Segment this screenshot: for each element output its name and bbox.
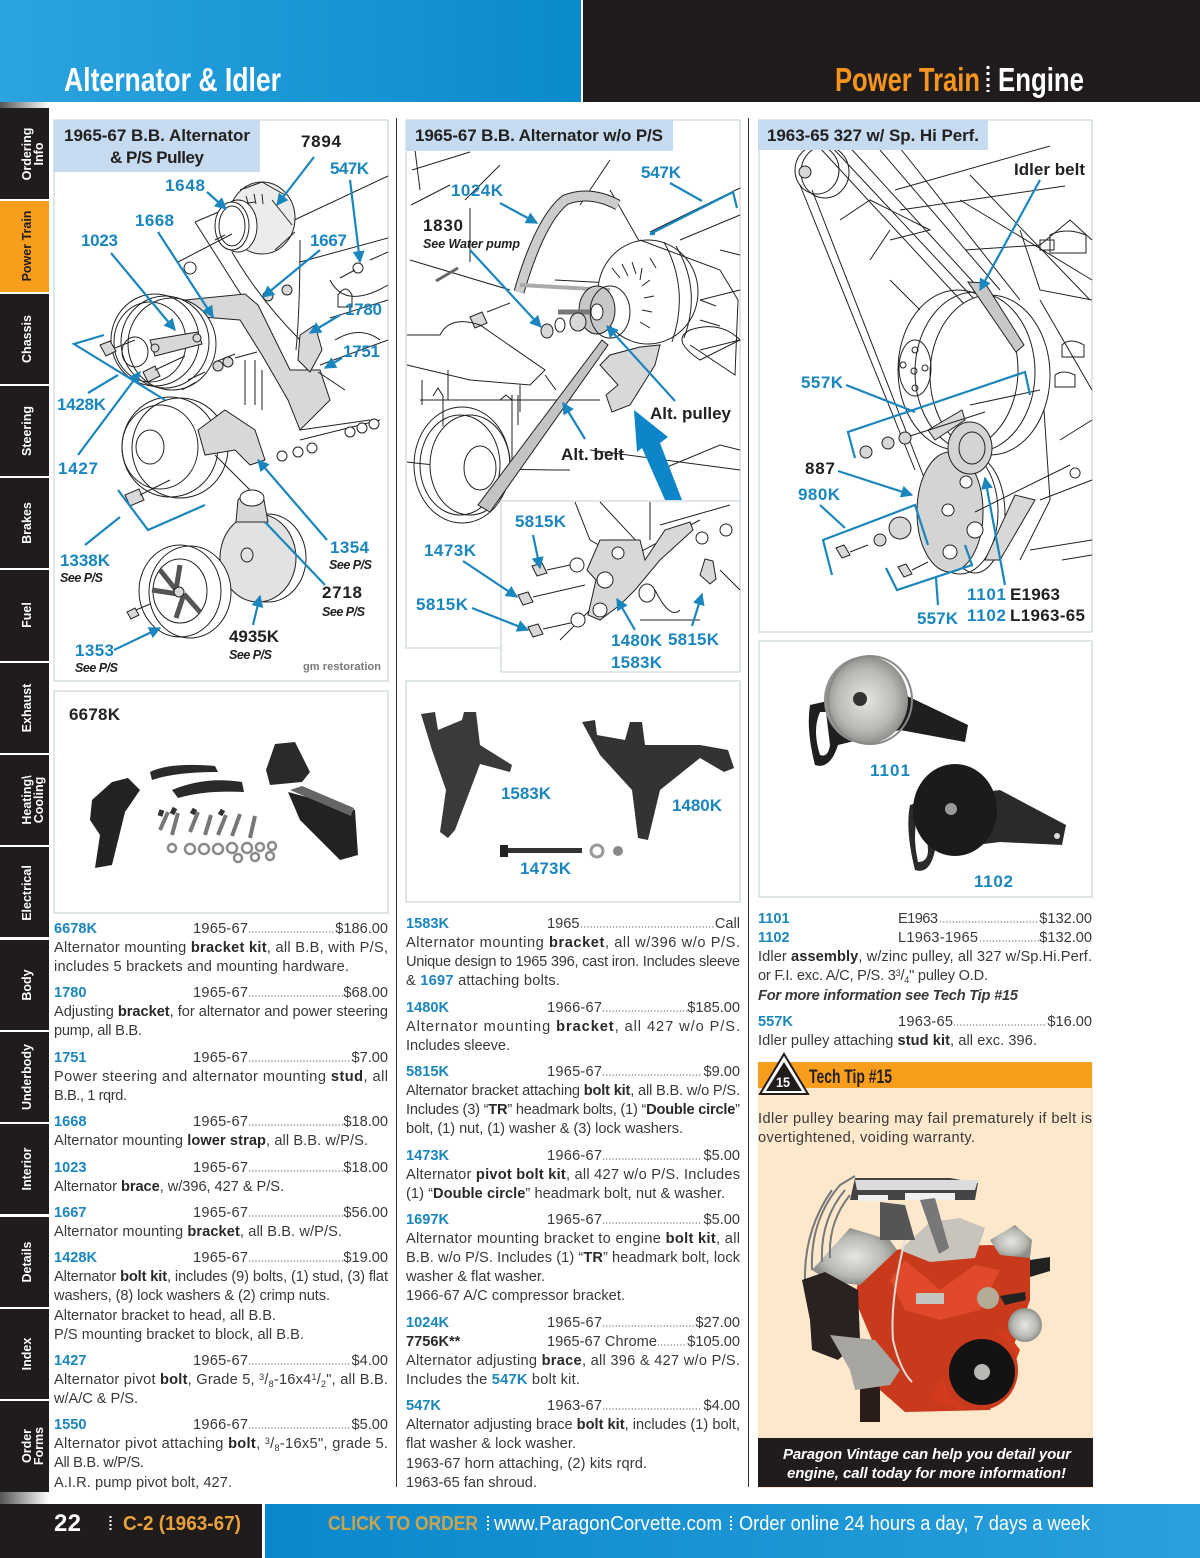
listing: 1480K: Includes sleeve. xyxy=(406,1038,510,1054)
tech tip heading bar xyxy=(758,1062,1092,1088)
part labels: 887 xyxy=(805,459,835,478)
part labels: See P/S xyxy=(329,558,373,572)
tab: exhaust: Exhaust xyxy=(20,683,34,732)
listing: 1751: B.B., 1 rqrd. xyxy=(54,1088,127,1104)
tech tip text: overtightened, voiding warranty. xyxy=(758,1130,975,1146)
panel: 1963-65 327 w/ Sp. Hi Perf. diagram xyxy=(758,120,1092,632)
listing: 1550: / xyxy=(270,1436,275,1452)
listing: 1101 and 1102: 1101 xyxy=(758,911,790,927)
part labels: 1667 xyxy=(310,231,347,250)
listing: 1428K: washers, (8) lock washers & (2) crimp nuts. xyxy=(53,1288,330,1304)
tab: index: Index xyxy=(20,1338,34,1370)
part labels: 5815K xyxy=(668,630,720,649)
part labels: See P/S xyxy=(60,571,104,585)
listing: 5815K: Alternator bracket attaching bolt kit, all B.B. w/o P/S. xyxy=(406,1083,740,1099)
panel title xyxy=(758,120,988,150)
listing: 1427: / xyxy=(264,1372,269,1388)
part labels: 7894 xyxy=(301,132,342,151)
photo labels: 1583K xyxy=(501,784,552,803)
tab: chassis xyxy=(0,294,49,384)
listing: 1101 and 1102: 1102 xyxy=(758,930,790,946)
tab: power train: Power Train xyxy=(20,211,34,281)
listing: 1751: 1751 xyxy=(54,1050,86,1066)
panel: 1101 and 1102 idler pulley photo xyxy=(759,641,1092,897)
tab: body: Body xyxy=(20,969,34,1001)
part labels xyxy=(416,163,732,672)
listing: 1024K and 7756K: Alternator adjusting brace, all 396 & 427 w/o P/S. xyxy=(406,1353,740,1369)
footer: order bar: Order online 24 hours a day, 7 days a week xyxy=(739,1513,1091,1535)
tab: electrical: Electrical xyxy=(20,865,34,921)
photo: right bracket xyxy=(582,720,734,840)
listing: 1428K: $19.00 xyxy=(343,1250,388,1266)
listing: 1101 and 1102: $132.00 xyxy=(1039,930,1092,946)
listing: 6678K: 6678K xyxy=(54,921,97,937)
listing: 1550: Alternator pivot attaching bolt, xyxy=(54,1436,260,1452)
tab: interior: Interior xyxy=(20,1147,34,1191)
part labels: 557K xyxy=(801,373,844,392)
part labels: See P/S xyxy=(229,648,273,662)
listing: 1780: pump, all B.B. xyxy=(54,1023,142,1039)
page title: Alternator & Idler xyxy=(64,61,281,98)
listing: 1101 and 1102: Idler assembly, w/zinc pulley, all 327 w/Sp.Hi.Perf. xyxy=(758,949,1092,965)
listing: 5815K: 5815K xyxy=(406,1064,449,1080)
panel title: 1963-65 327 w/ Sp. Hi Perf. xyxy=(767,126,979,145)
listing: 1101 and 1102 xyxy=(758,911,1092,1004)
photo labels: 1473K xyxy=(520,859,572,878)
listing: 1751: $7.00 xyxy=(351,1050,388,1066)
listing: 1667: Alternator mounting bracket, all B.B. w/P/S. xyxy=(54,1224,342,1240)
listing: 1428K: P/S mounting bracket to block, all B.B. xyxy=(54,1327,304,1343)
part labels: 1102 xyxy=(967,606,1006,625)
panel title: 1965-67 B.B. Alternator & P/S Pulley: 1965-67 B.B. Alternator xyxy=(64,126,250,145)
part labels: See Water pump xyxy=(423,237,520,251)
header: black section band: Engine xyxy=(998,61,1084,98)
panel: 1965-67 B.B. alternator w/o P/S diagram xyxy=(406,120,740,672)
part labels: 1780 xyxy=(345,300,382,319)
line art: alternator without power steering xyxy=(407,150,740,523)
listing: 1101 and 1102: " pulley O.D. xyxy=(909,968,988,984)
listing: 1780: 1965-67 xyxy=(193,985,248,1001)
listing: 1428K: Alternator bracket to head, all B.B. xyxy=(54,1308,276,1324)
panel title xyxy=(406,120,673,151)
tab: ordering info xyxy=(0,108,49,199)
listing: 5815K xyxy=(406,1064,740,1137)
footer: order bar: CLICK TO ORDER xyxy=(328,1513,478,1535)
part labels: 1648 xyxy=(165,176,205,195)
panel: 6678K bracket kit photo xyxy=(54,691,388,913)
listing: 1550 xyxy=(54,1417,388,1491)
tab: steering: Steering xyxy=(20,406,34,456)
tech tip heading bar: Tech Tip #15 xyxy=(809,1067,892,1088)
photo: 1101 zinc pulley xyxy=(809,656,968,766)
part labels: L1963-65 xyxy=(1010,606,1085,625)
listing: 1473K: (1) “Double circle” headmark bolt, nut & washer. xyxy=(406,1186,725,1202)
photo: left bracket xyxy=(421,712,512,838)
listing: 1427: / xyxy=(317,1372,322,1388)
listing: 1480K: Alternator mounting bracket, all 427 w/o P/S. xyxy=(406,1019,740,1035)
listing: 1024K and 7756K: 7756K** xyxy=(406,1334,461,1350)
tab: heating cooling: Cooling xyxy=(32,777,46,823)
listing: 1024K and 7756K: 1965-67 Chrome xyxy=(547,1334,657,1350)
listing: 1101 and 1102: 4 xyxy=(904,975,909,985)
panel: tech tip #15 xyxy=(758,1054,1093,1488)
listing: 1550: -16x5", grade 5. xyxy=(280,1436,388,1452)
part labels: 4935K xyxy=(229,627,280,646)
tab: interior xyxy=(0,1124,49,1214)
big arrow: bracket detail xyxy=(634,410,682,500)
listing: 547K xyxy=(406,1398,740,1491)
listing: 1550: A.I.R. pump pivot bolt, 427. xyxy=(54,1475,232,1491)
part labels: 557K xyxy=(917,609,959,628)
listing: 1473K xyxy=(406,1148,740,1202)
tab: chassis: Chassis xyxy=(20,315,34,363)
part labels: 980K xyxy=(798,485,841,504)
listing: 547K: 1963-65 fan shroud. xyxy=(406,1475,537,1491)
tab: order forms xyxy=(0,1401,49,1492)
tab: power train xyxy=(0,201,49,292)
listing: 6678K: includes 5 brackets and mounting hardware. xyxy=(54,959,349,975)
panel title: 1965-67 B.B. Alternator & P/S Pulley xyxy=(54,120,260,172)
listing: 1668: 1668 xyxy=(54,1114,86,1130)
tab: underbody: Underbody xyxy=(20,1044,34,1110)
text column 3: part listings xyxy=(758,911,1092,1049)
footer: order bar: www.ParagonCorvette.com xyxy=(493,1513,722,1535)
part labels: 1023 xyxy=(81,231,118,250)
listing: 1473K: 1966-67 xyxy=(547,1148,602,1164)
listing: 1583K: & 1697 attaching bolts. xyxy=(406,973,560,989)
call-to-action bar: Paragon Vintage can help you detail your xyxy=(783,1446,1072,1463)
listing: 1583K: 1965 xyxy=(547,916,579,932)
photo label: 6678K xyxy=(69,705,121,724)
tab: details xyxy=(0,1217,49,1307)
listing: 1667: $56.00 xyxy=(343,1205,388,1221)
listing: 1101 and 1102: L1963-1965 xyxy=(898,930,978,946)
part labels: 5815K xyxy=(416,595,469,614)
listing: 1697K: 1697K xyxy=(406,1212,449,1228)
listing: 1101 and 1102: / xyxy=(900,968,905,984)
part labels: 1830 xyxy=(423,216,463,235)
tab: exhaust xyxy=(0,663,49,753)
listing: 5815K: $9.00 xyxy=(703,1064,740,1080)
listing: 557K: 557K xyxy=(758,1014,793,1030)
listing: 1697K: B.B. w/o P/S. Includes (1) “TR” headmark bolt, lock xyxy=(406,1250,741,1266)
tab: body xyxy=(0,940,49,1030)
tab: order forms: Order xyxy=(20,1429,34,1463)
listing: 1780: 1780 xyxy=(54,985,86,1001)
listing: 1550: All B.B. w/P/S. xyxy=(54,1455,144,1471)
call-to-action bar xyxy=(758,1438,1093,1487)
listing: 1101 and 1102: or F.I. exc. A/C, P/S. 3 xyxy=(758,968,896,984)
listing: 1667: 1667 xyxy=(54,1205,86,1221)
listing: 1667: 1965-67 xyxy=(193,1205,248,1221)
photo: bolt and washers xyxy=(500,845,623,857)
listing: 1428K: 1428K xyxy=(54,1250,97,1266)
part labels: 1473K xyxy=(424,541,477,560)
listing: 1550: 3 xyxy=(265,1436,270,1446)
listing: 1780 xyxy=(54,985,388,1039)
part labels: 5815K xyxy=(515,512,567,531)
listing: 1751 xyxy=(54,1050,388,1104)
icon: warning triangle: 15 xyxy=(776,1074,790,1090)
listing: 547K: flat washer & lock washer. xyxy=(406,1436,576,1452)
listing: 1550: 1966-67 xyxy=(193,1417,248,1433)
listing: 1668 xyxy=(54,1114,388,1149)
part labels: Alt. belt xyxy=(561,445,624,464)
arrows: part callouts xyxy=(820,180,1040,605)
listing: 1473K: Alternator pivot bolt kit, all 427 w/o P/S. Includes xyxy=(406,1167,740,1183)
listing: 1024K and 7756K xyxy=(406,1315,740,1388)
footer: page number and model bar xyxy=(0,1504,262,1558)
listing: 1023: 1023 xyxy=(54,1160,86,1176)
listing: 1101 and 1102: E1963 xyxy=(898,911,938,927)
part labels: gm restoration xyxy=(303,661,381,673)
listing: 6678K: 1965-67 xyxy=(193,921,248,937)
tab: heating cooling: Heating\ xyxy=(20,775,34,825)
part labels: 2718 xyxy=(322,583,362,602)
photo labels: 1102 xyxy=(974,872,1013,891)
call-to-action bar: engine, call today for more information! xyxy=(787,1465,1066,1482)
listing: 547K: $4.00 xyxy=(703,1398,740,1414)
listing: 557K: 1963-65 xyxy=(898,1014,953,1030)
line art: P/S pulley and pump xyxy=(122,360,380,638)
listing: 1024K and 7756K: $105.00 xyxy=(687,1334,740,1350)
tab: ordering info: Info xyxy=(32,142,46,165)
text column 2: part listings xyxy=(405,916,741,1491)
listing: 1480K: $185.00 xyxy=(687,1000,740,1016)
listing: 1427: 1965-67 xyxy=(193,1353,248,1369)
listing: 547K: 1963-67 horn attaching, (2) kits rqrd. xyxy=(406,1456,647,1472)
part labels: 1583K xyxy=(611,653,663,672)
tab: brakes xyxy=(0,478,49,568)
listing: 1427 xyxy=(53,1353,388,1407)
tab: brakes: Brakes xyxy=(20,502,34,544)
photo labels: 1101 xyxy=(870,761,910,780)
tab: order forms: Forms xyxy=(32,1427,46,1465)
part labels xyxy=(798,160,1085,628)
listing: 1427: ", all B.B. xyxy=(326,1372,388,1388)
listing: 1550: 1550 xyxy=(54,1417,86,1433)
listing: 1427: 8 xyxy=(269,1379,274,1389)
inset: bracket exploded view xyxy=(501,501,740,672)
tab: underbody xyxy=(0,1032,49,1122)
listing: 1024K and 7756K: $27.00 xyxy=(695,1315,740,1331)
listing: 5815K: 1965-67 xyxy=(547,1064,602,1080)
part labels: E1963 xyxy=(1010,585,1060,604)
listing: 1427: 2 xyxy=(321,1379,326,1389)
listing: 1697K: Alternator mounting bracket to engine bolt kit, all xyxy=(406,1231,740,1247)
listing: 547K: Alternator adjusting brace bolt kit, includes (1) bolt, xyxy=(406,1417,740,1433)
listing: 1427: Alternator pivot bolt, Grade 5, xyxy=(54,1372,255,1388)
listing: 1101 and 1102: $132.00 xyxy=(1039,911,1092,927)
listing: 1550: $5.00 xyxy=(351,1417,388,1433)
part labels: 547K xyxy=(641,163,682,182)
part labels xyxy=(57,132,382,675)
listing: 557K: Idler pulley attaching stud kit, all exc. 396. xyxy=(758,1033,1037,1049)
listing: 6678K xyxy=(54,921,388,975)
listing: 1697K xyxy=(405,1212,741,1304)
text column 1: part listings xyxy=(53,921,388,1491)
listing: 1024K and 7756K: 1965-67 xyxy=(547,1315,602,1331)
listing: 1583K xyxy=(406,916,740,989)
listing: 1780: Adjusting bracket, for alternator and power steering xyxy=(54,1004,388,1020)
tab: index xyxy=(0,1309,49,1399)
listing: 1583K: Unique design to 1965 396, cast iron. Includes sleeve xyxy=(406,954,740,970)
listing: 1583K: 1583K xyxy=(406,916,449,932)
panel title: 1965-67 B.B. Alternator w/o P/S xyxy=(415,126,663,145)
photo: red small-block engine xyxy=(802,1176,1050,1422)
part labels: Alt. pulley xyxy=(650,404,732,423)
listing: 1480K: 1480K xyxy=(406,1000,449,1016)
part labels: 1353 xyxy=(75,641,114,660)
listing: 1023: 1965-67 xyxy=(193,1160,248,1176)
tab: steering xyxy=(0,386,49,476)
listing: 557K xyxy=(758,1014,1092,1049)
listing: 1023 xyxy=(54,1160,388,1195)
page number: 22 xyxy=(54,1510,81,1537)
part labels: 547K xyxy=(330,159,370,178)
part labels: 1428K xyxy=(57,395,107,414)
part labels: 1354 xyxy=(330,538,370,557)
listing: 1751: 1965-67 xyxy=(193,1050,248,1066)
tab: details: Details xyxy=(20,1241,34,1282)
listing: 1023: Alternator brace, w/396, 427 & P/S. xyxy=(54,1179,284,1195)
photo labels xyxy=(501,784,723,878)
listing: 1667 xyxy=(54,1205,388,1240)
listing: 1697K: 1965-67 xyxy=(547,1212,602,1228)
part labels: See P/S xyxy=(322,605,366,619)
panel: 1965-67 B.B. alternator and P/S pulley diagram xyxy=(54,120,388,681)
listing: 6678K: Alternator mounting bracket kit, all B.B, with P/S, xyxy=(54,940,388,956)
icon: warning triangle xyxy=(760,1054,808,1094)
tab: heating cooling xyxy=(0,755,49,845)
line art: idler pulley on engine xyxy=(795,142,1092,577)
part labels: 1480K xyxy=(611,631,663,650)
part labels: Idler belt xyxy=(1014,160,1085,179)
arrows: part callouts xyxy=(463,183,737,630)
listing: 1427: 1427 xyxy=(54,1353,86,1369)
listing: 5815K: bolt, (1) nut, (1) washer & (3) lock washers. xyxy=(406,1121,683,1137)
listing: 1480K: 1966-67 xyxy=(547,1000,602,1016)
line art: alternator assembly xyxy=(100,176,388,430)
tech tip text xyxy=(758,1111,1092,1146)
listing: 1023: $18.00 xyxy=(343,1160,388,1176)
listing: 1101 and 1102: For more information see Tech Tip #15 xyxy=(758,988,1019,1004)
listing: 1101 and 1102: 3 xyxy=(896,968,901,978)
part labels: 1101 xyxy=(967,585,1006,604)
photo: 1102 black pulley xyxy=(908,764,1066,871)
listing: 5815K: Includes (3) “TR” headmark bolts, (1) “Double circle” xyxy=(406,1102,740,1118)
part labels: 1751 xyxy=(343,342,380,361)
listing: 1668: $18.00 xyxy=(343,1114,388,1130)
part labels: 1668 xyxy=(135,211,174,230)
listing: 1427: w/A/C & P/S. xyxy=(53,1391,138,1407)
part labels: 1338K xyxy=(60,551,111,570)
listing: 557K: $16.00 xyxy=(1047,1014,1092,1030)
listing: 1473K: $5.00 xyxy=(703,1148,740,1164)
photo labels: 1480K xyxy=(672,796,723,815)
listing: 1024K and 7756K: Includes the 547K bolt kit. xyxy=(406,1372,580,1388)
part labels: See P/S xyxy=(75,661,119,675)
tab: fuel: Fuel xyxy=(20,602,34,628)
listing: 1668: 1965-67 xyxy=(193,1114,248,1130)
listing: 547K: 1963-67 xyxy=(547,1398,602,1414)
listing: 547K: 547K xyxy=(406,1398,441,1414)
part labels: 1024K xyxy=(451,181,504,200)
listing: 1024K and 7756K: 1024K xyxy=(406,1315,449,1331)
listing: 1427: 3 xyxy=(259,1372,264,1382)
arrows: part callouts xyxy=(74,157,360,650)
listing: 1668: Alternator mounting lower strap, all B.B. w/P/S. xyxy=(54,1133,368,1149)
listing: 1480K xyxy=(406,1000,740,1054)
listing: 1583K: Alternator mounting bracket, all w/396 w/o P/S. xyxy=(406,935,740,951)
section title: Power Train xyxy=(835,61,980,98)
listing: 1697K: $5.00 xyxy=(703,1212,740,1228)
part labels: 1427 xyxy=(58,459,98,478)
listing: 1427: -16x4 xyxy=(274,1372,311,1388)
footer: order bar xyxy=(265,1504,1200,1558)
listing: 1428K: Alternator bolt kit, includes (9) bolts, (1) stud, (3) flat xyxy=(54,1269,388,1285)
listing: 1751: Power steering and alternator mounting stud, all xyxy=(54,1069,388,1085)
photo: brackets and hardware xyxy=(90,742,358,868)
listing: 1550: 8 xyxy=(275,1443,280,1453)
listing: 1427: $4.00 xyxy=(351,1353,388,1369)
listing: 1697K: washer & flat washer. xyxy=(405,1269,545,1285)
listing: 1428K xyxy=(53,1250,388,1343)
photo labels xyxy=(870,761,1013,891)
listing: 1428K: 1965-67 xyxy=(193,1250,248,1266)
listing: 1473K: 1473K xyxy=(406,1148,449,1164)
panel: 1583K 1480K 1473K parts photo xyxy=(406,681,740,902)
listing: 6678K: $186.00 xyxy=(335,921,388,937)
tab: electrical xyxy=(0,847,49,937)
listing: 1583K: Call xyxy=(715,916,740,932)
model range: C-2 (1963-67) xyxy=(123,1513,241,1535)
tech tip text: Idler pulley bearing may fail prematurely if belt is xyxy=(758,1111,1092,1127)
listing: 1780: $68.00 xyxy=(343,985,388,1001)
header: black section band xyxy=(583,0,1200,102)
listing: 1427: 1 xyxy=(311,1372,317,1382)
panel title: 1965-67 B.B. Alternator & P/S Pulley: & P/S Pulley xyxy=(110,148,205,167)
listing: 1697K: 1966-67 A/C compressor bracket. xyxy=(406,1288,625,1304)
tab: ordering info: Ordering xyxy=(20,128,34,180)
sidebar tabs xyxy=(0,102,49,1504)
tab: fuel xyxy=(0,570,49,661)
header: blue title band xyxy=(0,0,581,102)
